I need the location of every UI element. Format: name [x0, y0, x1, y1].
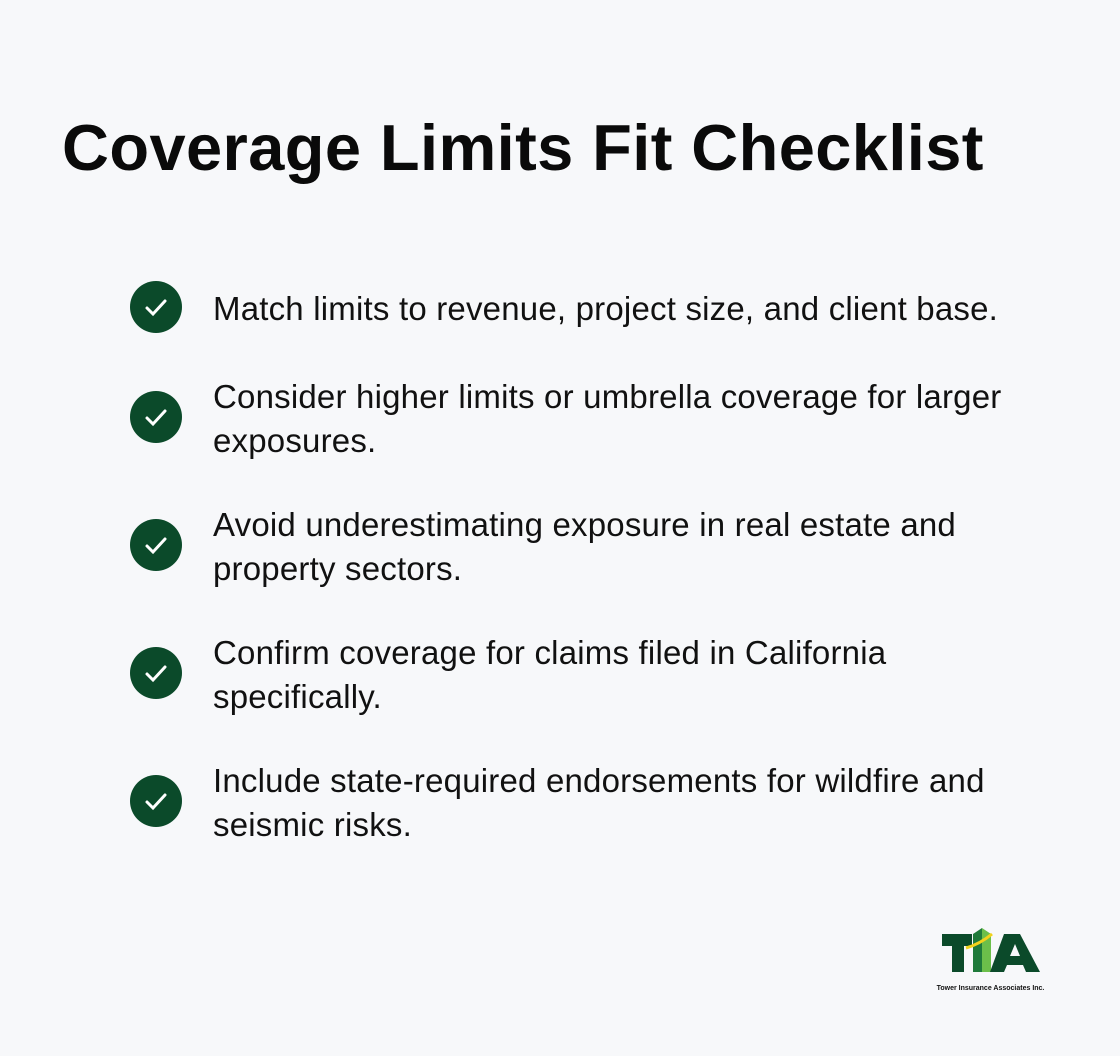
- text 5: Include state-required endorsements for wildfire and: [213, 762, 985, 799]
- text 3: property sectors.: [213, 550, 462, 587]
- text 4: specifically.: [213, 678, 382, 715]
- item 1: [130, 281, 998, 333]
- text 2: [213, 378, 1001, 459]
- text 5: seismic risks.: [213, 806, 412, 843]
- text 3: [213, 506, 956, 587]
- item 3: [130, 506, 956, 587]
- icon: check: [130, 647, 182, 699]
- text 2: Consider higher limits or umbrella coverage for larger: [213, 378, 1001, 415]
- icon: check: [130, 775, 182, 827]
- text 3: Avoid underestimating exposure in real estate and: [213, 506, 956, 543]
- text 2: exposures.: [213, 422, 376, 459]
- logo: [936, 928, 1044, 992]
- item 2: [130, 378, 1001, 459]
- item 4: [130, 634, 886, 715]
- icon: check: [130, 519, 182, 571]
- text 5: [213, 762, 985, 843]
- text 1: Match limits to revenue, project size, and client base.: [213, 290, 998, 327]
- title: Coverage Limits Fit Checklist: [62, 111, 984, 184]
- text 4: [213, 634, 886, 715]
- logo: Tower Insurance Associates Inc.: [937, 985, 1044, 992]
- item 5: [130, 762, 985, 843]
- icon: check: [130, 281, 182, 333]
- icon: check: [130, 391, 182, 443]
- text 4: Confirm coverage for claims filed in California: [213, 634, 886, 671]
